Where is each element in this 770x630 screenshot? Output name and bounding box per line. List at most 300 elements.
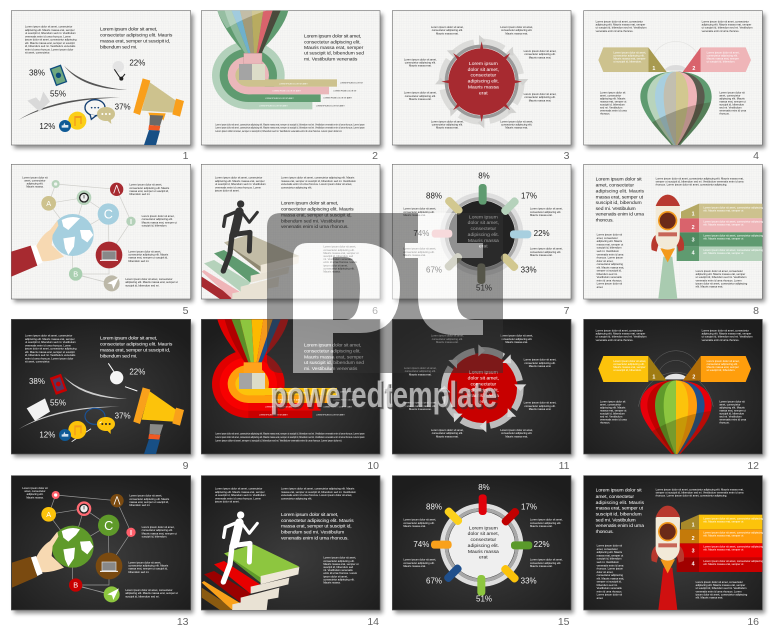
page number 7: 7 bbox=[564, 305, 570, 317]
small text blocks: bibendum sed mi. bbox=[597, 272, 618, 276]
small text blocks: ut suscipit id, bibendum sed mi. Vestibulum bbox=[215, 493, 267, 497]
small text blocks: Lorem ipsum dolor sit amet, consectetur bbox=[125, 277, 173, 281]
heading text: venenatis enim id urna bbox=[596, 212, 644, 218]
small text blocks: adipiscing elit. Mauris massa erat, semper ut bbox=[125, 591, 178, 595]
small text block: venenatis enim id urna rhoncus. Lorem bbox=[25, 343, 72, 347]
small text blocks: bibendum sed mi. bbox=[128, 259, 150, 263]
small text blocks: Lorem ipsum dolor sit amet, bbox=[128, 560, 161, 564]
heading text: amet, consectetur bbox=[596, 183, 634, 189]
percentages bbox=[413, 483, 550, 604]
small text blocks: Mauris massa erat, semper ut bbox=[142, 531, 177, 535]
ribbon 1: Mauris massa erat, semper bbox=[613, 365, 646, 369]
network lines bbox=[49, 184, 131, 283]
small text blocks: enim id urna rhoncus. bbox=[597, 278, 622, 282]
callout texts: Mauris massa erat. bbox=[436, 340, 459, 344]
small text blocks: adipiscing elit. Mauris massa erat, semper bbox=[215, 490, 265, 494]
small text blocks: suscipit id, bibendum. bbox=[142, 534, 167, 538]
small text blocks: Mauris massa erat. bbox=[403, 564, 426, 568]
small text blocks: Lorem ipsum dolor sit bbox=[597, 282, 622, 286]
callout texts: consectetur adipiscing elit. bbox=[524, 95, 556, 99]
small text blocks: massa erat, semper ut suscipit id, bbox=[129, 189, 169, 193]
percentages: 17% bbox=[521, 191, 537, 200]
small text blocks: massa erat, semper ut bbox=[719, 409, 746, 413]
step bands: elit. Mauris massa erat, semper ut bbox=[703, 534, 744, 538]
percentages: 12% bbox=[39, 431, 55, 440]
small text block: Lorem ipsum dolor sit amet, consectetur adipiscing elit. Mauris massa erat, semper ut suscipit id, bibendum sed mi. Vestibulum venenatis enim id urna rhoncus. Lorem ipsum bbox=[215, 123, 365, 126]
small text blocks: ut suscipit id, bibendum sed mi. Vestibulum bbox=[596, 26, 647, 30]
heading text: suscipit id, bibendum bbox=[596, 200, 642, 206]
percentages: 38% bbox=[29, 68, 45, 77]
icon: music and like bbox=[59, 112, 86, 132]
step bands: 4 bbox=[692, 561, 695, 567]
heading text: massa erat, semper ut suscipit id, bbox=[100, 347, 170, 353]
percentages: 22% bbox=[129, 59, 145, 68]
small text block: ipsum dolor sit amet, consectetur adipiscing bbox=[25, 347, 77, 351]
small text blocks: venenatis enim id urna rhoncus. Lorem ipsum dolor sit amet, bbox=[281, 493, 352, 497]
slide 3: light circular arrows bbox=[392, 11, 574, 148]
percentages: 33% bbox=[521, 265, 537, 274]
heading text: adipiscing elit. Mauris bbox=[596, 189, 644, 195]
small text block: enim id urna rhoncus. Lorem ipsum dolor bbox=[25, 356, 73, 360]
small text blocks: venenatis enim id urna rhoncus. Lorem bbox=[696, 589, 742, 593]
stacked books bbox=[202, 234, 299, 299]
icon: chat bubbles bbox=[85, 100, 115, 124]
icon: money bbox=[50, 64, 67, 86]
small text blocks: suscipit id, bibendum bbox=[597, 246, 622, 250]
page number 14: 14 bbox=[367, 616, 379, 628]
callout texts: Mauris massa erat. bbox=[409, 97, 432, 101]
slide 11: dark circular arrows bbox=[392, 319, 574, 457]
center text: Lorem ipsum bbox=[469, 61, 498, 67]
heading text bbox=[596, 488, 644, 535]
ribbon 2: 2 bbox=[692, 375, 695, 381]
small text block: adipiscing elit. Mauris massa erat, semper bbox=[25, 337, 75, 341]
heading text: Lorem ipsum dolor sit amet, bbox=[281, 512, 338, 518]
heading text: suscipit id, bibendum bbox=[596, 511, 642, 517]
small text blocks: suscipit id, bibendum bbox=[719, 103, 745, 107]
step bands: Lorem ipsum dolor sit amet, consectetur adipiscing bbox=[703, 234, 764, 238]
bars with labels: LOREM IPSUM DOLOR SIT bbox=[340, 391, 364, 393]
icon: bulb bbox=[113, 61, 125, 81]
small text blocks: consectetur adipiscing elit. bbox=[323, 559, 355, 563]
small text blocks bbox=[22, 486, 178, 598]
small text blocks: Lorem ipsum dolor sit amet, bbox=[323, 556, 356, 560]
exhaust bbox=[658, 257, 677, 299]
balloon stripes bbox=[217, 11, 288, 53]
curves bbox=[18, 66, 127, 120]
small text blocks: Lorem ipsum dolor sit bbox=[22, 486, 48, 490]
network nodes: B bbox=[73, 581, 78, 590]
callout texts: Mauris massa erat. bbox=[436, 434, 459, 438]
small text blocks: massa erat, semper ut bbox=[600, 100, 627, 104]
small text block: Lorem ipsum dolor sit amet, consectetur adipiscing elit. Mauris massa erat, semper ut suscipit id, bibendum sed mi. Vestibulum venenatis enim id urna rhoncus. Lorem ipsum bbox=[215, 433, 365, 436]
small text blocks: Lorem ipsum dolor sit amet, consectetur bbox=[702, 328, 749, 332]
small text blocks: Lorem ipsum dolor sit amet, consectetur bbox=[696, 269, 743, 273]
center text: Mauris massa bbox=[468, 393, 499, 399]
slide 6: light runner on books bbox=[201, 164, 383, 302]
small text blocks: consectetur adipiscing elit. bbox=[403, 521, 435, 525]
small text blocks: rhoncus. bbox=[719, 421, 730, 425]
bars with labels bbox=[248, 79, 364, 109]
heading text: ut suscipit id, bibendum sed bbox=[304, 51, 364, 57]
small text blocks: adipiscing elit. Mauris bbox=[719, 406, 745, 410]
heading text: Lorem ipsum dolor sit bbox=[596, 488, 642, 494]
callout texts: consectetur adipiscing elit. bbox=[405, 94, 436, 98]
center text: Mauris massa bbox=[468, 238, 499, 244]
small text blocks: massa erat, semper ut bbox=[600, 409, 627, 413]
bars with labels: LOREM IPSUM DOLOR SIT AMET bbox=[316, 414, 345, 417]
small text blocks: Lorem ipsum dolor sit bbox=[597, 544, 622, 548]
watermark: poweredtemplate wordmark: poweredtemplate bbox=[270, 374, 497, 415]
center text: Lorem ipsum bbox=[469, 370, 498, 376]
ribbon 2: 2 bbox=[692, 66, 695, 72]
small text blocks: consectetur adipiscing bbox=[597, 262, 623, 266]
small text blocks: adipiscing elit. Mauris massa erat, semper ut bbox=[125, 280, 178, 284]
small text blocks: Mauris massa. bbox=[26, 495, 44, 499]
page number 15: 15 bbox=[558, 616, 570, 628]
percentages: 22% bbox=[534, 540, 550, 549]
callout texts: consectetur adipiscing elit. bbox=[501, 431, 533, 435]
bars with labels: LOREM IPSUM DOLOR SIT AMET bbox=[316, 105, 345, 108]
ribbon 1: Lorem ipsum dolor sit amet, bbox=[613, 50, 646, 54]
small text blocks: Lorem ipsum dolor sit amet, consectetur bbox=[596, 19, 643, 23]
small text blocks: adipiscing elit. Mauris bbox=[597, 550, 623, 554]
curves bbox=[18, 377, 127, 429]
globe bbox=[52, 214, 94, 256]
slide 16: dark rocket bbox=[584, 476, 765, 613]
small text blocks: suscipit id, bibendum sed mi. bbox=[125, 283, 160, 287]
bars with labels: LOREM IPSUM DOLOR SIT bbox=[333, 90, 357, 92]
small text blocks: Mauris massa erat. bbox=[403, 524, 426, 528]
page number 2: 2 bbox=[372, 150, 378, 162]
small text blocks: elit. Mauris massa erat. bbox=[696, 595, 723, 599]
heading text: sed mi. Vestibulum bbox=[596, 517, 636, 523]
small text blocks: adipiscing elit. Mauris massa erat, semper bbox=[702, 23, 751, 27]
network nodes bbox=[41, 491, 136, 602]
step bands: Lorem ipsum dolor sit amet, consectetur adipiscing bbox=[703, 531, 764, 535]
small text blocks: sed mi. Vestibulum bbox=[597, 560, 620, 564]
heading text bbox=[281, 512, 354, 541]
step bands: 1 bbox=[692, 212, 695, 218]
step bands: elit. Mauris massa erat, semper ut bbox=[703, 519, 744, 523]
callout texts: Lorem ipsum dolor sit amet, bbox=[404, 401, 437, 405]
heading text: rhoncus. bbox=[596, 218, 614, 224]
slide 7: light percentage ring bbox=[392, 164, 574, 302]
slide 1: light megaphone bbox=[11, 11, 193, 148]
percentages bbox=[413, 172, 550, 293]
small text blocks: ut suscipit id, bibendum sed mi. Vestibulum bbox=[596, 335, 647, 339]
circular arrow diagram bbox=[435, 35, 528, 128]
small text blocks: suscipit id, bibendum bbox=[600, 103, 626, 107]
small text blocks: Lorem ipsum dolor sit amet, consectetur bbox=[125, 588, 173, 592]
percentages: 67% bbox=[426, 265, 442, 274]
small text blocks: semper ut suscipit id, bibendum sed mi. Vestibulum venenatis enim id urna bbox=[656, 490, 744, 494]
small text blocks: mi. Vestibulum venenatis bbox=[323, 568, 353, 572]
small text blocks: amet, consectetur bbox=[719, 403, 741, 407]
page number 16: 16 bbox=[747, 616, 759, 628]
small text blocks: Lorem ipsum dolor sit amet, bbox=[323, 245, 356, 249]
small text blocks: Lorem ipsum dolor sit bbox=[600, 400, 626, 404]
heading text: Lorem ipsum dolor sit amet, bbox=[304, 33, 361, 39]
small text blocks: ut suscipit id, bibendum sed mi. Vestibulum bbox=[702, 26, 753, 30]
small text blocks: consectetur adipiscing elit. bbox=[403, 210, 435, 214]
ribbon 2: Mauris massa erat, semper bbox=[707, 365, 739, 369]
heading text: consectetur adipiscing elit. Mauris bbox=[100, 342, 173, 348]
page number 8: 8 bbox=[753, 305, 759, 317]
small text blocks: suscipit id, bibendum bbox=[597, 557, 622, 561]
callout texts: consectetur adipiscing elit. bbox=[501, 122, 533, 126]
small text blocks: adipiscing elit. Mauris massa erat, semper bbox=[596, 23, 645, 27]
center text: erat bbox=[479, 90, 488, 96]
small text block: Lorem ipsum dolor sit amet, consectetur bbox=[25, 25, 72, 29]
small text block: elit. Mauris massa erat, semper ut suscipit bbox=[25, 350, 75, 354]
step bands: Lorem ipsum dolor sit amet, consectetur adipiscing bbox=[703, 248, 764, 252]
small text blocks: consectetur adipiscing elit. bbox=[403, 250, 435, 254]
rocket bbox=[651, 195, 684, 262]
heading text: Lorem ipsum dolor sit amet, bbox=[100, 336, 157, 342]
small text blocks: ut suscipit id, bibendum sed mi. Vestibulum bbox=[702, 335, 753, 339]
small text block: enim id urna rhoncus. Lorem ipsum dolor bbox=[25, 47, 73, 51]
watermark: pt logo bbox=[267, 213, 503, 373]
icon: bulb bbox=[108, 363, 137, 391]
hot air balloon bbox=[638, 380, 715, 455]
callout texts: consectetur adipiscing elit. bbox=[524, 52, 556, 56]
heading text bbox=[281, 201, 354, 230]
small text blocks: Lorem ipsum dolor sit amet, consectetur bbox=[696, 580, 743, 584]
bars with labels bbox=[248, 388, 364, 418]
percentages: 17% bbox=[521, 502, 537, 511]
small text blocks: suscipit id, bibendum sed bbox=[323, 254, 354, 258]
center text: erat bbox=[479, 399, 488, 405]
step bands: 2 bbox=[692, 225, 695, 231]
small text blocks: Lorem ipsum dolor sit amet, bbox=[403, 207, 436, 211]
small text blocks bbox=[596, 328, 753, 425]
small text block: Lorem ipsum dolor sit amet, consectetur adipiscing elit. Mauris massa erat, semper ut suscipit id, bibendum sed mi. Vestibulum venenatis enim id urna rhoncus. Lorem ipsum bbox=[215, 436, 365, 439]
step bands: 2 bbox=[692, 536, 695, 542]
small text block bbox=[215, 123, 365, 133]
bars with labels: LOREM IPSUM DOLOR SIT AMET bbox=[279, 83, 309, 86]
page number 11: 11 bbox=[559, 460, 570, 472]
ring tags bbox=[431, 494, 532, 596]
callout texts: Mauris massa erat. bbox=[505, 340, 528, 344]
small text blocks: elit. Mauris massa erat. bbox=[696, 284, 723, 288]
small text blocks: ipsum dolor sit amet, bbox=[323, 574, 348, 578]
hot air balloon bbox=[638, 72, 715, 147]
callout texts: Mauris massa erat. bbox=[409, 372, 432, 376]
small text blocks bbox=[215, 176, 359, 273]
heading text: Mauris massa erat, semper bbox=[304, 45, 364, 51]
step bands: 3 bbox=[692, 549, 695, 555]
small text blocks: Lorem ipsum dolor sit bbox=[719, 91, 745, 95]
small text blocks: venenatis enim id urna rhoncus. Lorem bbox=[215, 185, 262, 189]
small text blocks: semper ut suscipit id, bbox=[597, 580, 622, 584]
heading text: massa erat, semper ut bbox=[596, 506, 644, 512]
percentages: 37% bbox=[115, 102, 131, 111]
heading text: Mauris massa erat, semper bbox=[304, 354, 364, 360]
bars with labels: LOREM IPSUM DOLOR SIT AMET bbox=[323, 96, 353, 99]
small text blocks bbox=[215, 487, 359, 584]
small text blocks: adipiscing elit. Mauris bbox=[600, 406, 626, 410]
callout texts: consectetur adipiscing elit. bbox=[524, 404, 556, 408]
balloon stripes bbox=[217, 319, 288, 362]
small text blocks: rhoncus. bbox=[719, 112, 730, 116]
small text blocks: Lorem ipsum dolor sit amet, bbox=[530, 558, 563, 562]
small text blocks: enim id urna rhoncus. bbox=[597, 589, 622, 593]
small text blocks: consectetur adipiscing elit. bbox=[142, 217, 173, 221]
percentages: 55% bbox=[50, 398, 66, 407]
callout texts: Lorem ipsum dolor sit amet, bbox=[500, 25, 533, 29]
ribbon 1: consectetur adipiscing elit. bbox=[613, 362, 645, 366]
runner silhouette bbox=[223, 511, 257, 582]
page number 5: 5 bbox=[183, 305, 189, 317]
callout texts: Lorem ipsum dolor sit amet, bbox=[404, 57, 437, 61]
small text blocks: consectetur adipiscing elit. bbox=[281, 496, 312, 500]
small text blocks: Mauris massa. bbox=[26, 185, 44, 189]
center text: erat bbox=[479, 244, 488, 250]
small text blocks: Lorem ipsum dolor sit amet, bbox=[530, 207, 563, 211]
small text blocks: adipiscing elit. Mauris bbox=[597, 239, 623, 243]
small text block: elit. Mauris massa erat, semper ut suscipit bbox=[25, 41, 75, 45]
small text blocks: elit. Mauris massa erat, bbox=[597, 265, 624, 269]
small text blocks: venenatis enim id urna bbox=[600, 418, 627, 422]
heading text: venenatis enim id urna rhoncus. bbox=[281, 224, 349, 230]
callout texts: consectetur adipiscing elit. bbox=[524, 361, 556, 365]
callout texts: consectetur adipiscing elit. bbox=[405, 404, 436, 408]
small text blocks: rhoncus. Lorem ipsum dolor sit amet, consectetur adipiscing. bbox=[656, 493, 727, 497]
small text blocks: amet. bbox=[597, 596, 604, 600]
heading text: massa erat, semper ut suscipit id, bbox=[100, 38, 170, 44]
page number 1: 1 bbox=[183, 150, 189, 162]
callout texts: Lorem ipsum dolor sit amet, bbox=[431, 25, 464, 29]
center text: dolor sit amet, bbox=[468, 376, 499, 382]
small text blocks: consectetur adipiscing elit. bbox=[323, 266, 355, 270]
callout texts: consectetur adipiscing elit. bbox=[405, 369, 436, 373]
small text blocks: Mauris massa erat, semper ut bbox=[323, 251, 359, 255]
basket bbox=[239, 53, 265, 80]
callout texts: Mauris massa erat. bbox=[529, 364, 552, 368]
percentages: 33% bbox=[521, 576, 537, 585]
ribbon 2: consectetur adipiscing elit. bbox=[707, 53, 738, 57]
heading text: Lorem ipsum dolor sit bbox=[596, 176, 642, 182]
small text blocks: massa erat, semper ut suscipit id, bbox=[129, 500, 169, 504]
slide 15: dark percentage ring bbox=[392, 476, 574, 613]
small text blocks bbox=[22, 175, 178, 287]
small text blocks: Mauris massa erat. bbox=[530, 253, 553, 257]
small text blocks: Lorem ipsum dolor sit amet, consectetur bbox=[702, 19, 749, 23]
small text blocks: Lorem ipsum dolor sit amet, bbox=[403, 558, 436, 562]
callout texts: Mauris massa erat. bbox=[505, 31, 528, 35]
small text blocks: Vestibulum venenatis bbox=[597, 275, 622, 279]
small text block: Lorem ipsum dolor sit amet, semper ut suscipit id, bibendum sed mi. Vestibulum venenatis enim id urna rhoncus. Lorem ipsum dolor sit. bbox=[215, 130, 342, 133]
bars with labels: LOREM IPSUM DOLOR SIT AMET bbox=[259, 414, 289, 417]
small text blocks: adipiscing elit. Mauris massa erat, semper bbox=[215, 179, 265, 183]
page number 13: 13 bbox=[177, 616, 189, 628]
callout texts: consectetur adipiscing elit. bbox=[432, 122, 463, 126]
icon: music and like bbox=[59, 421, 86, 441]
bars with labels: LOREM IPSUM DOLOR SIT AMET bbox=[265, 406, 295, 409]
small text blocks: consectetur adipiscing elit. bbox=[530, 521, 561, 525]
small text blocks: venenatis enim id urna rhoncus. bbox=[596, 29, 634, 33]
small text block: Lorem ipsum dolor sit amet, consectetur bbox=[25, 334, 72, 338]
small text blocks: Mauris massa erat. bbox=[530, 213, 553, 217]
network nodes: C bbox=[104, 208, 113, 222]
ribbon 2: Mauris massa erat, semper bbox=[707, 56, 739, 60]
callout texts: Mauris massa erat. bbox=[505, 126, 528, 130]
heading text bbox=[596, 176, 644, 224]
callout texts: consectetur adipiscing elit. bbox=[501, 28, 533, 32]
icon: money bbox=[50, 374, 67, 395]
step bands: elit. Mauris massa erat, semper ut bbox=[703, 562, 744, 566]
small text blocks: Lorem ipsum dolor sit amet, bbox=[128, 249, 161, 253]
small text blocks: Lorem ipsum dolor sit amet, bbox=[142, 214, 175, 218]
small text block: id, bibendum sed mi. Vestibulum venenatis bbox=[25, 44, 76, 48]
small text blocks: adipiscing elit. Mauris massa erat, semper bbox=[596, 332, 645, 336]
ribbon 1: consectetur adipiscing elit. bbox=[613, 53, 645, 57]
callout texts: Mauris massa erat. bbox=[436, 126, 459, 130]
hand bbox=[11, 221, 64, 277]
callout texts: Lorem ipsum dolor sit amet, bbox=[404, 366, 437, 370]
heading text: Lorem ipsum dolor sit amet, bbox=[304, 343, 361, 349]
callout texts: Lorem ipsum dolor sit amet, bbox=[404, 91, 437, 95]
small text blocks: adipiscing elit. Mauris massa erat, semper bbox=[696, 583, 745, 587]
small text blocks: dolor sit amet, bbox=[597, 259, 614, 263]
exhaust bbox=[658, 568, 677, 610]
small text blocks: ut suscipit id, bibendum sed mi. Vestibulum bbox=[696, 586, 747, 590]
small text blocks: Mauris massa erat. bbox=[403, 253, 426, 257]
ribbon 1: ut suscipit id, bibendum. bbox=[613, 368, 642, 372]
small text blocks: venenatis enim id urna bbox=[719, 109, 747, 113]
slide 9: dark megaphone bbox=[11, 319, 193, 457]
small text blocks: Lorem ipsum dolor sit amet, bbox=[129, 494, 162, 498]
globe bbox=[52, 526, 94, 568]
small text blocks: venenatis enim id urna bbox=[597, 252, 624, 256]
step bands: Lorem ipsum dolor sit amet, consectetur adipiscing bbox=[703, 516, 764, 520]
stacked books bbox=[202, 544, 299, 610]
small text blocks: rhoncus. bbox=[600, 112, 610, 116]
step bands: Lorem ipsum dolor sit amet, consectetur adipiscing bbox=[703, 559, 764, 563]
ribbon 1: ut suscipit id, bibendum. bbox=[613, 59, 642, 63]
center text: adipiscing elit. bbox=[468, 79, 499, 85]
ribbon 2: Lorem ipsum dolor sit amet, bbox=[707, 50, 740, 54]
ribbon 1: Mauris massa erat, semper bbox=[613, 56, 646, 60]
small text blocks: ipsum dolor sit amet, bbox=[323, 263, 348, 267]
callout texts: Lorem ipsum dolor sit amet, bbox=[524, 358, 557, 362]
callout texts: Mauris massa erat. bbox=[505, 434, 528, 438]
step bands: 4 bbox=[692, 250, 695, 256]
heading text: consectetur adipiscing elit. Mauris bbox=[281, 207, 354, 213]
bars with labels: LOREM IPSUM DOLOR SIT bbox=[333, 399, 357, 401]
small text blocks: ipsum dolor sit amet. bbox=[215, 500, 240, 504]
center text: Mauris massa bbox=[468, 84, 499, 90]
heading text: mi. Vestibulum venenatis bbox=[304, 57, 358, 63]
callout texts: Mauris massa erat. bbox=[529, 98, 552, 102]
small text blocks: Lorem ipsum dolor sit bbox=[719, 400, 745, 404]
small text blocks: Lorem ipsum dolor sit amet, consectetur bbox=[215, 176, 262, 180]
percentages: 74% bbox=[413, 229, 429, 238]
ribbon 2: consectetur adipiscing elit. bbox=[707, 362, 738, 366]
page number 4: 4 bbox=[753, 150, 759, 162]
small text blocks: venenatis enim id urna bbox=[719, 418, 747, 422]
step bands: elit. Mauris massa erat, semper ut bbox=[703, 251, 744, 255]
center text: Lorem ipsum bbox=[469, 525, 498, 531]
small text blocks: adipiscing elit. Mauris bbox=[600, 97, 626, 101]
percentages: 12% bbox=[39, 122, 55, 131]
small text blocks: Lorem ipsum dolor sit amet, consectetur bbox=[215, 487, 262, 491]
runner silhouette bbox=[223, 200, 257, 271]
small text blocks: mi. Vestibulum venenatis bbox=[323, 257, 353, 261]
ring tags bbox=[432, 184, 531, 284]
small text block: ut suscipit id, bibendum sed mi. Vestibulum bbox=[25, 340, 77, 344]
